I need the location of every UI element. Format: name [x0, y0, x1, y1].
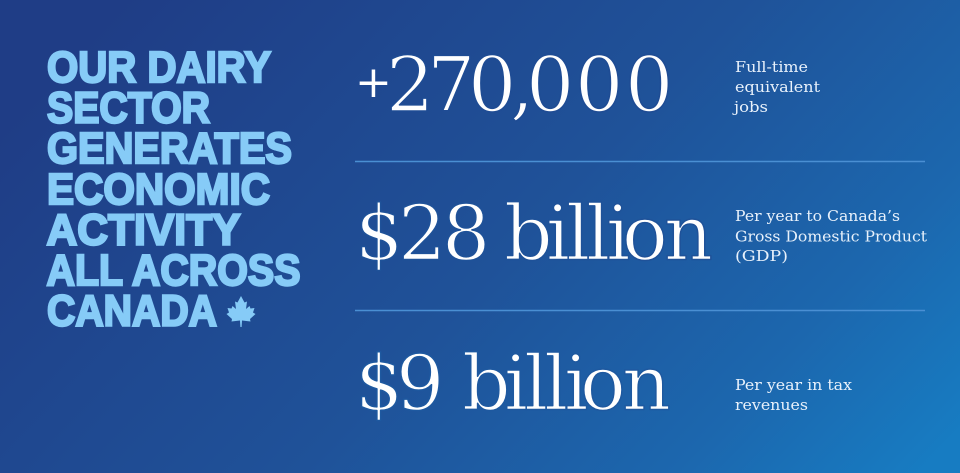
text: GDP description: (GDP): [735, 247, 788, 265]
stat: GDP figure: $28 billion: [355, 188, 713, 278]
stat: jobs figure: 270,000: [386, 40, 673, 129]
title: GENERATES: [47, 124, 292, 173]
text: tax description: revenues: [735, 396, 808, 414]
title: SECTOR: [47, 84, 210, 132]
title: OUR DAIRY: [47, 43, 271, 92]
title: ECONOMIC: [47, 165, 270, 214]
title: [46, 43, 300, 336]
title: CANADA: [47, 286, 217, 336]
stat: tax figure: $9 billion: [355, 338, 671, 428]
stat: jobs figure: +: [355, 57, 392, 108]
title: ALL ACROSS: [46, 246, 300, 295]
text: GDP description: Per year to Canada’s: [735, 207, 900, 225]
text: GDP description: Gross Domestic Product: [735, 228, 927, 246]
title: ACTIVITY: [46, 206, 240, 254]
icon: maple leaf: [226, 296, 256, 327]
text: jobs description: equivalent: [735, 78, 820, 96]
text: jobs description: jobs: [732, 98, 768, 116]
text: jobs description: Full-time: [735, 58, 808, 76]
text: tax description: Per year in tax: [735, 376, 853, 394]
